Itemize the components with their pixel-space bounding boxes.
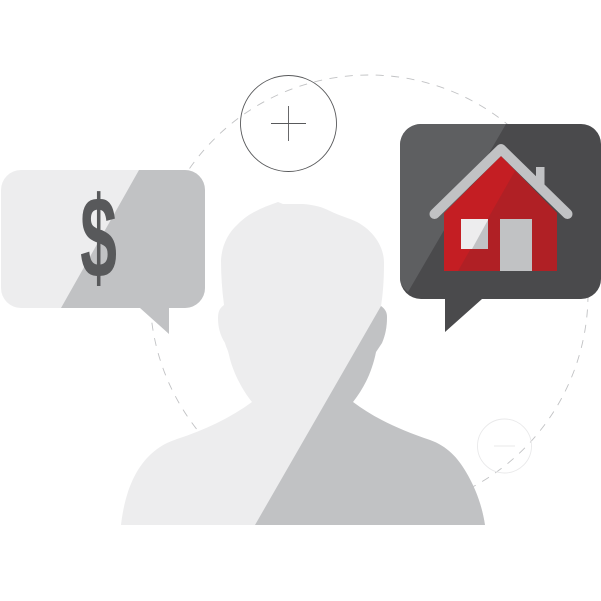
door (500, 219, 532, 271)
speech bubble: money (1, 170, 205, 334)
dashed orbit circle (150, 75, 588, 513)
house wall (444, 156, 557, 271)
silhouette light side (121, 202, 485, 525)
house wall shade (458, 171, 557, 271)
window (461, 219, 488, 249)
speech bubble: home (400, 124, 601, 332)
person silhouette (121, 202, 485, 525)
icon: house (434, 149, 568, 271)
icon: plus circle (240, 76, 336, 172)
roof (434, 149, 568, 214)
silhouette shaded side (255, 306, 485, 525)
bubble highlight (400, 124, 506, 292)
bubble light base (1, 170, 205, 308)
icon: minus circle (478, 419, 532, 473)
chimney (536, 167, 544, 189)
bubble shaded side with tail (61, 170, 205, 334)
bubble dark base with tail (400, 124, 601, 332)
icon: dollar sign: $ (80, 174, 117, 303)
